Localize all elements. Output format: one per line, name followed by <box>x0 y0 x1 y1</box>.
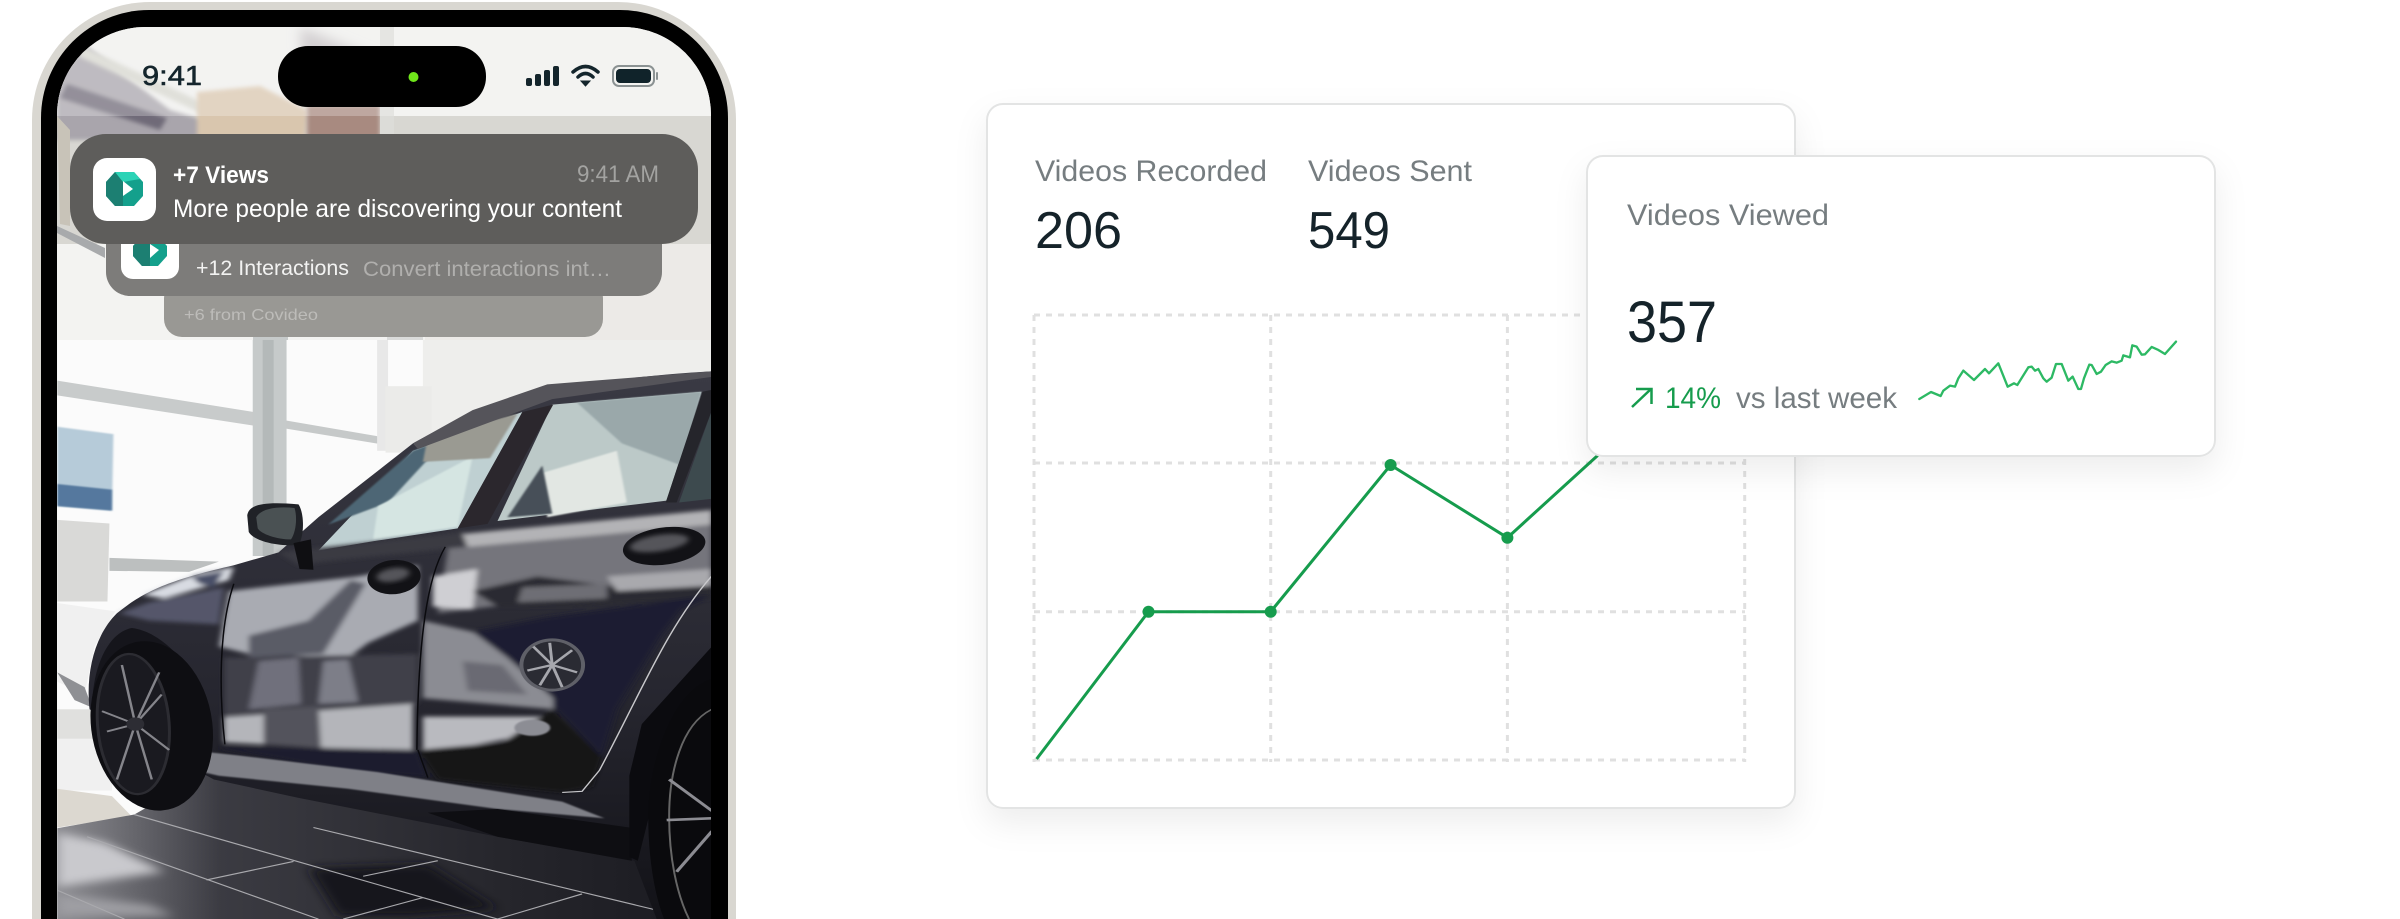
line chart <box>1034 315 1745 762</box>
seams <box>221 547 445 778</box>
stat: videos sent: 549 <box>1308 202 1390 260</box>
stat: videos sent <box>1308 155 1473 260</box>
dynamic island <box>278 46 486 107</box>
mirror <box>247 503 303 545</box>
icon: up arrow <box>1632 389 1652 407</box>
text: discovering: More people are discovering your content <box>173 195 622 223</box>
third stacked notification <box>164 296 603 337</box>
door handles <box>623 526 706 566</box>
phone mockup <box>32 2 736 919</box>
videos viewed card <box>1587 156 2215 456</box>
white car behind <box>57 603 115 695</box>
poster <box>57 427 113 511</box>
phone screen photo: car in showroom <box>57 27 712 919</box>
status time: 9:41 <box>142 60 202 91</box>
primary notification <box>70 134 698 244</box>
stat: videos recorded: 206 <box>1035 202 1122 260</box>
icon: signal <box>526 66 559 86</box>
front wheel <box>93 628 173 692</box>
main photo scene <box>57 340 712 919</box>
sign <box>57 520 109 601</box>
floor <box>57 775 657 919</box>
text: +6 from Covideo: +6 from Covideo <box>184 307 318 324</box>
value: 14%: 14% <box>1665 382 1721 415</box>
value: 357: 357 <box>1627 290 1717 355</box>
icon: app logo <box>93 158 156 221</box>
top of photo: interior reflection <box>57 27 711 340</box>
phone titanium frame <box>32 2 736 919</box>
sparkline <box>1919 342 2176 399</box>
stat: videos recorded <box>1035 155 1267 260</box>
reflected wheel <box>519 638 585 692</box>
text: +7 Views: +7 Views <box>173 162 269 189</box>
body reflections <box>119 510 712 792</box>
card background <box>987 104 1795 808</box>
stat: videos sent: Videos Sent <box>1308 155 1473 188</box>
windows <box>318 412 522 551</box>
icon: app logo small <box>121 244 179 279</box>
overlay card background <box>1587 156 2215 456</box>
label: videos viewed: Videos Viewed <box>1627 199 1829 232</box>
phone black bezel <box>41 10 728 919</box>
status bar wash <box>57 27 711 116</box>
icon: wifi <box>573 66 598 86</box>
car body <box>89 371 712 919</box>
stat: videos recorded: Videos Recorded <box>1035 155 1267 188</box>
rear wheel <box>648 747 711 919</box>
text: +12 Interactions: +12 Interactions <box>196 257 349 280</box>
text: Convert interactions: Convert interactions int… <box>363 258 611 281</box>
label: vs last week: vs last week <box>1736 382 1898 415</box>
text: 9:41 AM: 9:41 AM <box>577 161 659 188</box>
second stacked notification <box>106 244 662 296</box>
main stats card <box>987 104 1795 808</box>
sill highlight <box>187 750 604 818</box>
icon: battery <box>613 66 658 86</box>
